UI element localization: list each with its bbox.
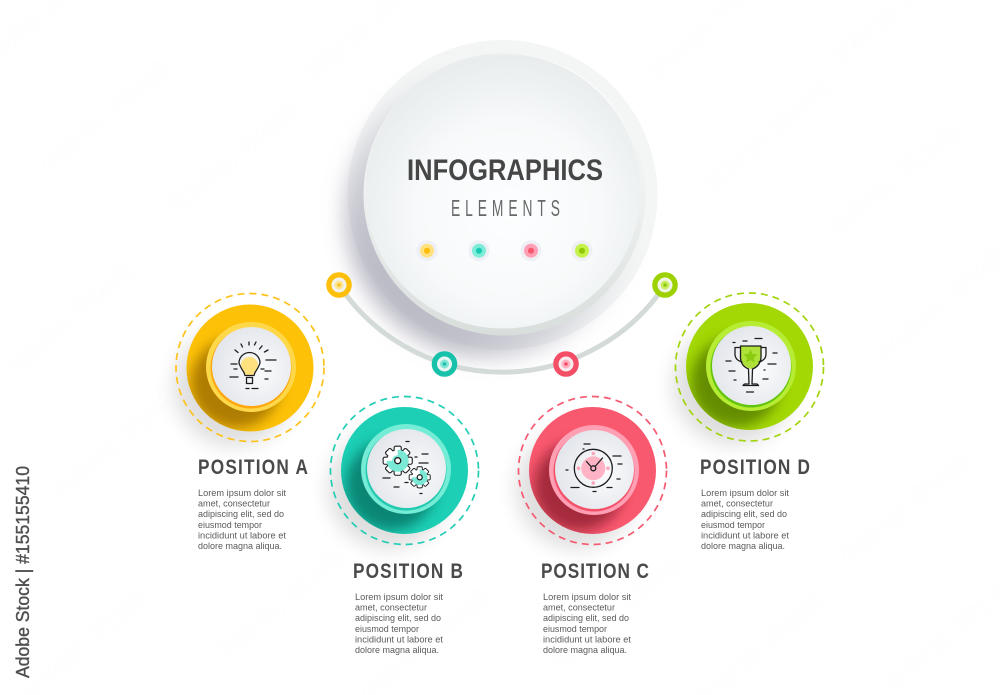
description: incididunt ut labore et — [198, 530, 286, 540]
description: eiusmod tempor — [355, 624, 419, 634]
watermark pattern: Adobe Stock — [544, 550, 685, 676]
icon: gears — [383, 442, 430, 494]
connecting arc — [339, 285, 665, 372]
description: amet, consectetur — [355, 603, 427, 613]
description: eiusmod tempor — [198, 520, 262, 530]
description: incididunt ut labore et — [355, 634, 443, 644]
description: Lorem ipsum dolor sit — [701, 488, 789, 498]
watermark pattern: Adobe Stock — [696, 72, 837, 198]
watermark pattern: Adobe Stock — [161, 95, 302, 221]
description: Lorem ipsum dolor sit — [198, 488, 286, 498]
heading: POSITION A — [198, 457, 308, 479]
description — [701, 488, 789, 551]
panel: position D — [674, 293, 824, 551]
title: INFOGRAPHICS — [407, 153, 603, 186]
description: eiusmod tempor — [543, 624, 607, 634]
watermark pattern: Adobe Stock — [0, 255, 140, 381]
description: dolore magna aliqua. — [355, 645, 439, 655]
watermark pattern: Adobe Stock — [824, 115, 965, 241]
watermark pattern: Adobe Stock — [34, 52, 175, 178]
heading: POSITION B — [353, 561, 463, 583]
arc node: red — [553, 351, 579, 377]
central plate — [344, 40, 658, 358]
description: amet, consectetur — [543, 603, 615, 613]
description: incididunt ut labore et — [543, 634, 631, 644]
description — [543, 592, 631, 655]
panel: position C — [516, 396, 666, 655]
watermark pattern: Adobe Stock — [44, 380, 185, 506]
stock id label: Adobe Stock | #155155410 — [13, 466, 33, 678]
description: dolore magna aliqua. — [701, 541, 785, 551]
description: dolore magna aliqua. — [198, 541, 282, 551]
arc node: yellow — [326, 272, 352, 298]
description: adipiscing elit, sed do — [198, 509, 284, 519]
description — [355, 592, 443, 655]
description: Lorem ipsum dolor sit — [543, 592, 631, 602]
icon: light bulb — [230, 342, 276, 388]
arc node: teal — [432, 351, 457, 377]
heading: POSITION D — [700, 457, 810, 479]
description: amet, consectetur — [701, 499, 773, 509]
description: adipiscing elit, sed do — [355, 613, 441, 623]
panel: position B — [328, 396, 478, 655]
icon: trophy — [726, 338, 777, 392]
subtitle: ELEMENTS — [451, 197, 560, 222]
arc node: green — [652, 272, 678, 298]
description: adipiscing elit, sed do — [543, 613, 629, 623]
description: Lorem ipsum dolor sit — [355, 592, 443, 602]
infographic canvas — [15, 40, 824, 678]
description: amet, consectetur — [198, 499, 270, 509]
watermark pattern: Adobe Stock — [209, 540, 350, 666]
panel: position A — [174, 294, 324, 551]
watermark pattern: Adobe Stock — [834, 445, 975, 571]
description: incididunt ut labore et — [701, 530, 789, 540]
legend dots — [416, 240, 592, 261]
description: eiusmod tempor — [701, 520, 765, 530]
description: adipiscing elit, sed do — [701, 509, 787, 519]
description — [198, 488, 286, 551]
heading: POSITION C — [541, 561, 649, 583]
icon: clock — [566, 444, 622, 492]
description: dolore magna aliqua. — [543, 645, 627, 655]
